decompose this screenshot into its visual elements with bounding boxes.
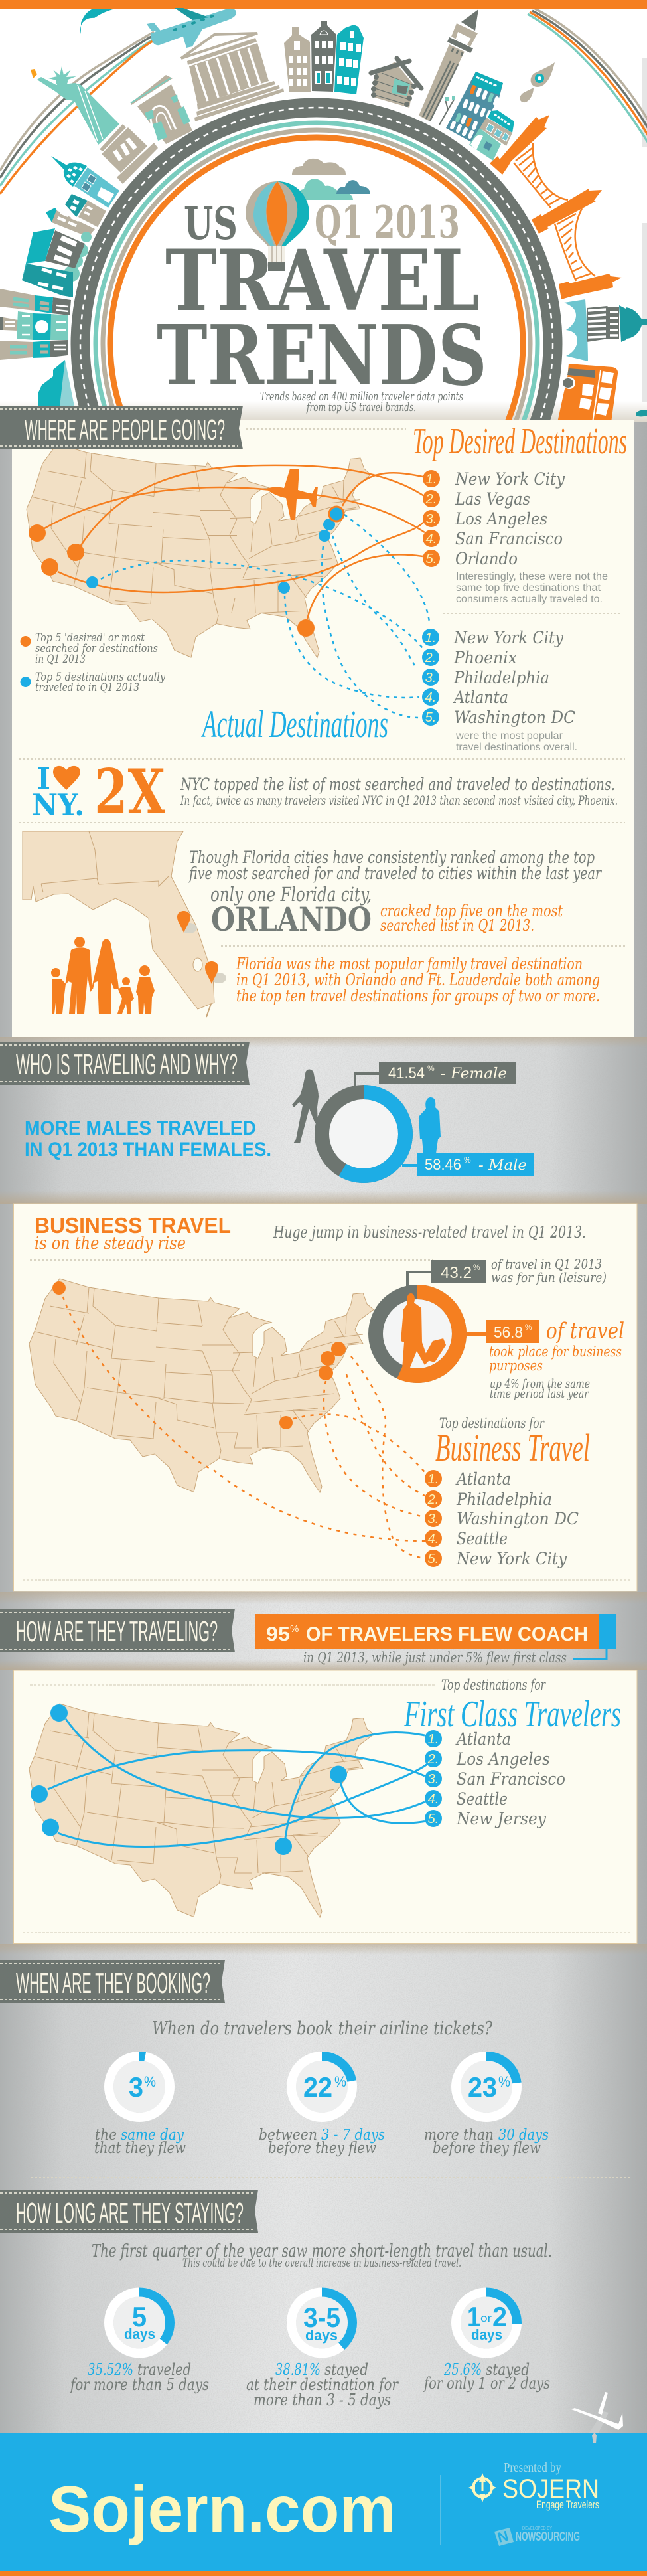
ring chart: 3-5 days: days xyxy=(305,2327,338,2344)
heading: business travel xyxy=(35,1213,231,1253)
desired destination routes xyxy=(43,465,425,619)
actual destination dashed routes xyxy=(101,515,429,718)
ring chart: 1 or 2 days: stayed xyxy=(486,2360,530,2379)
legend: Top 5 'desired' or most xyxy=(35,631,145,645)
first class destinations list: 4. xyxy=(428,1792,439,1807)
ring chart: 3 percent: that they flew xyxy=(94,2140,186,2157)
map pins xyxy=(29,507,344,637)
left teal block building xyxy=(22,228,92,297)
ring chart: 3 percent: % xyxy=(144,2073,156,2090)
2X stat: 2X xyxy=(94,756,166,828)
leisure callout: of travel in Q1 2013 xyxy=(491,1256,602,1272)
heading: more males traveled: IN Q1 2013 THAN FEMALES. xyxy=(25,1139,271,1161)
ring chart: 1 or 2 days: 25.6% xyxy=(443,2360,482,2379)
ring chart: 5 days: days xyxy=(124,2326,155,2342)
header illustration xyxy=(0,0,647,422)
business destinations list: 1. xyxy=(428,1472,439,1487)
female callout xyxy=(355,1062,516,1086)
heading: more males traveled: MORE MALES TRAVELED xyxy=(25,1117,256,1139)
columned building xyxy=(181,33,284,121)
left lower teal tower xyxy=(38,360,74,406)
business destinations list: 3. xyxy=(428,1512,439,1526)
subheading: top destinations: Top destinations for xyxy=(439,1415,545,1431)
business destinations list: 2. xyxy=(427,1492,439,1507)
sojern logo xyxy=(468,2473,599,2511)
subtitle: Trends based on 400 million traveler data points xyxy=(260,390,463,404)
desired destinations list: 3. xyxy=(426,512,437,526)
heading: business travel: is on the steady rise xyxy=(35,1234,186,1253)
ring chart: 22 percent: 22 xyxy=(303,2071,332,2103)
ring chart: 23 percent: 30 days xyxy=(498,2127,549,2144)
sojern logo: SOJERN xyxy=(502,2474,599,2504)
actual destinations list: 5. xyxy=(425,710,436,725)
nowsourcing logo: NOWSOURCING xyxy=(516,2530,580,2544)
first class destinations list: Atlanta xyxy=(455,1730,511,1749)
note on actual destinations xyxy=(455,730,577,753)
section banner: how long are they staying: HOW LONG ARE THEY STAYING? xyxy=(16,2197,244,2229)
icon: orange plane xyxy=(266,469,318,520)
leisure callout xyxy=(407,1256,607,1286)
i love ny logo: NY. xyxy=(32,787,84,823)
legend: traveled to in Q1 2013 xyxy=(35,681,139,694)
first class destinations list: 2. xyxy=(427,1752,439,1767)
florida map xyxy=(23,831,226,1017)
male callout xyxy=(402,1153,534,1176)
ring chart: 5 days: 35.52% xyxy=(88,2360,133,2379)
stay length intro: This could be due to the overall increase in business-related travel. xyxy=(182,2257,461,2270)
NYC text xyxy=(180,775,618,808)
subtitle: from top US travel brands. xyxy=(306,400,416,414)
ring chart: 3-5 days: at their destination for xyxy=(246,2375,399,2394)
business destinations list: Philadelphia xyxy=(456,1490,552,1509)
ring chart: 1 or 2 days: for only 1 or 2 days xyxy=(423,2374,550,2393)
first class map with routes xyxy=(29,1704,427,1917)
airplane xyxy=(147,8,236,48)
ring chart: 3-5 days xyxy=(246,2292,399,2409)
ring chart: 3 percent: 3 xyxy=(129,2071,143,2103)
left row of tilted buildings xyxy=(0,289,71,360)
us map with routes xyxy=(27,443,429,718)
panel: first class xyxy=(13,1670,637,1944)
actual destinations list: Washington DC xyxy=(454,708,575,727)
business destinations list: Atlanta xyxy=(455,1469,511,1489)
tall blue building xyxy=(446,72,503,143)
row houses xyxy=(284,21,364,94)
business destinations list: New York City xyxy=(456,1549,567,1568)
heading: more males traveled xyxy=(25,1117,271,1161)
i love ny logo xyxy=(32,761,84,823)
ring chart: 5 days xyxy=(69,2292,209,2394)
desired destinations list: 4. xyxy=(426,532,437,546)
business callout: up 4% from the same xyxy=(490,1377,590,1391)
first class destinations list: Los Angeles xyxy=(456,1749,550,1769)
ring chart: 22 percent: before they flew xyxy=(268,2140,376,2157)
ring chart: 3-5 days: 38.81% xyxy=(275,2360,321,2379)
ring chart: 1 or 2 days: 2 xyxy=(492,2301,507,2332)
routes xyxy=(48,1719,427,1847)
title: TRENDS: TRENDS xyxy=(157,307,487,404)
icon: family silhouette xyxy=(51,937,155,1014)
desired destinations list: San Francisco xyxy=(455,529,563,548)
ring chart: 3 percent xyxy=(94,2056,186,2157)
coach stat bar: OF TRAVELERS FLEW COACH xyxy=(306,1623,588,1645)
ring chart: 3-5 days: stayed xyxy=(324,2360,368,2379)
clock tower xyxy=(419,9,478,121)
section banner: where are people going xyxy=(0,406,243,449)
icon: male traveler xyxy=(419,1097,441,1153)
ring chart: 23 percent xyxy=(424,2056,549,2157)
panel: where are people going xyxy=(12,420,634,1037)
icon: business traveler xyxy=(401,1293,446,1369)
ring chart: 22 percent xyxy=(259,2056,385,2157)
male callout: - Male xyxy=(478,1157,527,1174)
actual destinations list: Atlanta xyxy=(453,688,508,707)
coach stat bar: 95 xyxy=(266,1623,290,1645)
ring chart: 22 percent: between xyxy=(259,2127,317,2144)
panel: business travel xyxy=(13,1204,637,1591)
log cabin xyxy=(371,58,421,108)
desired destinations list: Las Vegas xyxy=(455,489,530,509)
section banner: how are they traveling xyxy=(0,1609,235,1652)
booking question: When do travelers book their airline tickets? xyxy=(152,2018,493,2039)
female callout: 41.54 xyxy=(388,1064,425,1082)
first class destinations list: 3. xyxy=(428,1772,439,1787)
map pin: Orlando xyxy=(177,911,197,933)
orlando callout: ORLANDO xyxy=(211,900,372,939)
first class destinations list: Seattle xyxy=(457,1789,508,1809)
triumphal arch xyxy=(131,75,192,144)
female callout: % xyxy=(427,1064,435,1073)
presented by: Presented by xyxy=(504,2460,561,2475)
hot air balloon xyxy=(246,181,309,271)
coach stat bar: % xyxy=(290,1623,299,1635)
business destinations list: Seattle xyxy=(457,1529,508,1548)
street lamp xyxy=(439,96,455,125)
first class destinations list: 5. xyxy=(428,1812,439,1826)
double decker bus xyxy=(557,364,618,422)
business callout: time period last year xyxy=(490,1387,589,1401)
outer rainbow arc right xyxy=(528,9,647,142)
donut chart: business vs leisure xyxy=(376,1292,459,1376)
icon: female traveler xyxy=(292,1069,319,1143)
business destinations list: Washington DC xyxy=(457,1509,579,1528)
legend: in Q1 2013 xyxy=(35,653,86,666)
leisure callout: 43.2 xyxy=(441,1264,472,1282)
desired destinations list: 5. xyxy=(426,552,437,566)
section banner: who is traveling xyxy=(0,1042,250,1085)
sojern logo: Engage Travelers xyxy=(536,2498,599,2511)
family destination text: Florida was the most popular family travel destination xyxy=(236,955,583,973)
desired destinations list: New York City xyxy=(455,469,565,489)
orlando callout xyxy=(211,900,563,939)
business destinations list xyxy=(425,1469,579,1568)
first class destinations list: New Jersey xyxy=(456,1809,546,1828)
family destination text: the top ten travel destinations for groups of two or more. xyxy=(236,987,600,1005)
footer xyxy=(0,2433,647,2576)
stay length intro: The first quarter of the year saw more short-length travel than usual. xyxy=(92,2241,552,2261)
ring chart: 5 days: traveled xyxy=(137,2360,191,2379)
note on desired destinations: same top five destinations that xyxy=(456,582,601,594)
actual destinations list: 2. xyxy=(425,651,436,665)
business callout xyxy=(467,1318,624,1401)
ring chart: 3-5 days: 3-5 xyxy=(303,2302,340,2333)
left small buildings xyxy=(46,194,106,237)
business destinations list: 5. xyxy=(428,1552,439,1566)
nowsourcing logo: N xyxy=(496,2528,510,2546)
section banner: where are people going: WHERE ARE PEOPLE GOING? xyxy=(25,414,225,446)
ring chart: 3 percent: same day xyxy=(121,2127,184,2144)
business callout: took place for business xyxy=(489,1344,622,1360)
actual destinations list: 3. xyxy=(425,671,436,685)
ring chart: 1 or 2 days: days xyxy=(471,2326,502,2343)
first class destinations list: 1. xyxy=(428,1732,439,1747)
note on desired destinations: consumers actually traveled to. xyxy=(456,594,603,605)
desired destinations list: 2. xyxy=(425,492,437,507)
ring chart: 22 percent: 3 - 7 days xyxy=(321,2127,385,2144)
actual destinations list xyxy=(422,628,575,727)
section banner: who is traveling: WHO IS TRAVELING AND WHY? xyxy=(16,1048,238,1081)
desired destinations list: Orlando xyxy=(455,549,518,568)
leisure callout: % xyxy=(473,1263,480,1272)
teal drop at right edge xyxy=(636,410,647,416)
ring chart: 1 or 2 days: 1 xyxy=(467,2301,480,2332)
family destination text: in Q1 2013, with Orlando and Ft. Lauderdale both among xyxy=(236,971,600,989)
actual destinations list: Phoenix xyxy=(453,648,517,667)
small mint building xyxy=(469,110,514,161)
ring chart: 22 percent: % xyxy=(334,2073,346,2090)
ring chart: 3 percent: the xyxy=(95,2127,117,2144)
heading: business travel: BUSINESS TRAVEL xyxy=(35,1213,231,1238)
note on actual destinations: travel destinations overall. xyxy=(456,742,577,753)
male callout: 58.46 xyxy=(425,1156,461,1174)
florida text: Though Florida cities have consistently ranked among the top xyxy=(189,848,595,867)
nowsourcing logo xyxy=(494,2526,580,2546)
road ring xyxy=(70,98,563,420)
ring chart: 5 days: 5 xyxy=(132,2301,147,2332)
subtitle xyxy=(260,390,463,414)
icon: white plane xyxy=(571,2392,623,2443)
actual destinations list: 1. xyxy=(425,631,436,645)
orlando callout: searched list in Q1 2013. xyxy=(380,916,534,935)
legend: Top 5 destinations actually xyxy=(35,671,165,684)
i love ny logo: I xyxy=(37,761,50,796)
map pin: Ft. Lauderdale xyxy=(205,961,226,984)
note on desired destinations: Interestingly, these were not the xyxy=(456,571,608,582)
section banner: when are they booking xyxy=(0,1960,225,2003)
florida text xyxy=(188,848,602,906)
stay length intro xyxy=(92,2241,552,2270)
title: TRAVEL: TRAVEL xyxy=(165,232,480,330)
coach stat bar xyxy=(255,1614,616,1666)
ring chart: 23 percent: before they flew xyxy=(433,2140,541,2157)
dashed routes xyxy=(63,1297,425,1558)
business callout: of travel xyxy=(546,1318,624,1344)
coach stat bar: in Q1 2013, while just under 5% flew first class xyxy=(303,1650,567,1666)
section banner: how long are they staying xyxy=(0,2190,258,2233)
left capitol building xyxy=(51,156,119,208)
gender section xyxy=(25,1062,534,1176)
donut chart: gender xyxy=(322,1092,405,1176)
small clouds xyxy=(292,159,370,200)
ring chart: 1 or 2 days: or xyxy=(480,2313,492,2324)
subheading: top destinations: Top destinations for xyxy=(441,1677,546,1693)
business callout: purposes xyxy=(489,1358,543,1374)
business callout: 56.8 xyxy=(494,1324,523,1342)
desired destinations list xyxy=(423,469,565,568)
desired destinations list: 1. xyxy=(426,472,437,487)
actual destinations list: New York City xyxy=(453,628,563,647)
actual destinations list: 4. xyxy=(425,690,436,705)
actual destinations list: Philadelphia xyxy=(453,668,549,687)
business jump text: Huge jump in business-related travel in Q1 2013. xyxy=(273,1223,586,1242)
desired destinations list: Los Angeles xyxy=(455,509,547,528)
section banner: how are they traveling: HOW ARE THEY TRAVELING? xyxy=(16,1615,218,1648)
footer url: Sojern.com xyxy=(48,2472,396,2545)
male callout: % xyxy=(464,1155,471,1165)
ring chart: 1 or 2 days xyxy=(423,2292,550,2393)
florida text: only one Florida city, xyxy=(210,884,372,906)
ring chart: 23 percent: 23 xyxy=(468,2071,497,2103)
first class destinations list: San Francisco xyxy=(457,1769,565,1789)
female callout: - Female xyxy=(441,1066,507,1082)
note on actual destinations: were the most popular xyxy=(455,730,563,742)
domed capitol xyxy=(564,299,647,361)
title: Q1 2013: Q1 2013 xyxy=(315,197,460,248)
business map with routes xyxy=(29,1279,425,1558)
script heading: actual destinations: Actual Destinations xyxy=(201,702,388,746)
orange bridge xyxy=(490,115,622,299)
business destinations list: 4. xyxy=(428,1532,439,1546)
legend xyxy=(20,631,165,694)
statue of liberty xyxy=(31,66,158,184)
business callout: % xyxy=(525,1323,532,1332)
orlando callout: cracked top five on the most xyxy=(380,902,563,920)
ring chart: 3-5 days: more than 3 - 5 days xyxy=(253,2391,391,2409)
map pins xyxy=(31,1704,347,1855)
legend: searched for destinations xyxy=(35,642,158,655)
outer rainbow arc left xyxy=(0,32,160,194)
map pins xyxy=(52,1281,346,1429)
teal cloud top left xyxy=(80,9,115,34)
ring chart: 5 days: for more than 5 days xyxy=(69,2375,209,2394)
title: US: US xyxy=(184,197,238,250)
first class destinations list xyxy=(425,1730,565,1828)
section banner: when are they booking: WHEN ARE THEY BOOKING? xyxy=(16,1967,210,2000)
top orange bar xyxy=(0,0,647,9)
leisure callout: was for fun (leisure) xyxy=(491,1269,607,1285)
family destination text xyxy=(236,955,600,1005)
note on desired destinations xyxy=(456,571,608,605)
ring chart: 23 percent: % xyxy=(498,2073,510,2090)
ring chart: 23 percent: more than xyxy=(424,2127,494,2144)
nowsourcing logo: DEVELOPED BY xyxy=(522,2526,552,2531)
pin drop xyxy=(520,62,555,102)
